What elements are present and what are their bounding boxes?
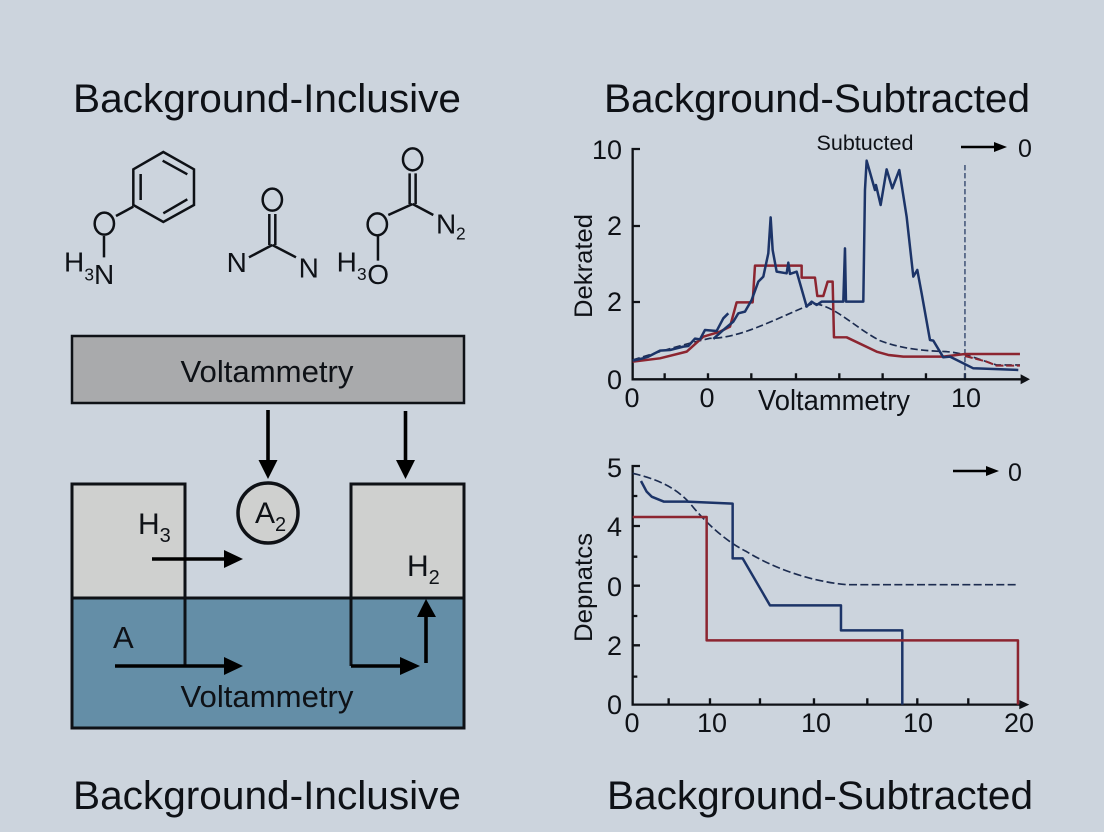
molecule: urea: N xyxy=(227,247,247,278)
molecule: carbamate: H xyxy=(337,247,357,278)
y ticks xyxy=(607,453,622,720)
molecule: urea xyxy=(227,189,319,284)
arrow: H3 right xyxy=(152,550,243,568)
label: H2: H xyxy=(407,550,429,583)
y ticks: 0 xyxy=(607,365,622,395)
panel: left electrode xyxy=(72,484,185,598)
x ticks xyxy=(624,383,981,413)
arrow legend: 0 xyxy=(1018,135,1032,163)
label: H3: 3 xyxy=(160,525,171,547)
arrow: up to H2 xyxy=(417,599,436,663)
x ticks: 0 xyxy=(624,708,640,738)
y ticks: 2 xyxy=(607,211,622,241)
icon: A2 circle: A xyxy=(255,497,275,530)
y ticks xyxy=(592,135,622,395)
chart: top right xyxy=(570,132,1032,417)
dashed curve xyxy=(633,473,1017,585)
molecule: urea: N xyxy=(299,253,319,284)
molecule: carbamate: 3 xyxy=(357,264,367,284)
axes xyxy=(633,149,1030,384)
heading: background-inclusive top: Background-Inclusive xyxy=(73,77,461,121)
dashed curve xyxy=(633,303,1020,365)
x ticks: 10 xyxy=(951,383,981,413)
arrow: bar to right box xyxy=(396,411,415,479)
icon: A2 circle xyxy=(238,483,298,543)
label: A: A xyxy=(113,620,134,655)
panel: voltammetry bar xyxy=(72,336,464,403)
y ticks: 2 xyxy=(607,287,622,317)
x ticks: 10 xyxy=(801,708,831,738)
arrow: right electrode horizontal xyxy=(351,657,420,675)
y ticks: 0 xyxy=(607,572,622,602)
red curve xyxy=(633,517,1018,705)
panel: voltammetry bar: Voltammetry xyxy=(180,354,354,389)
heading: background-subtracted bottom: Background-Subtracted xyxy=(607,774,1033,818)
blue curve xyxy=(633,161,1018,370)
molecule: phenoxy amine: N xyxy=(94,259,114,290)
arrow legend xyxy=(953,459,1022,487)
panel: right electrode xyxy=(351,484,464,598)
label: voltammetry: Voltammetry xyxy=(180,679,354,714)
x axis label: Voltammetry xyxy=(758,385,910,417)
x ticks: 10 xyxy=(903,708,933,738)
axes xyxy=(633,466,1029,709)
chart: bottom right xyxy=(570,453,1034,738)
arrow legend xyxy=(961,135,1032,163)
y axis label: Depnatcs xyxy=(570,533,598,642)
y ticks: 10 xyxy=(592,135,622,165)
arrow legend: 0 xyxy=(1008,459,1022,487)
label: H2: 2 xyxy=(429,567,440,589)
molecule structures xyxy=(64,148,466,290)
x ticks xyxy=(624,708,1034,738)
molecule: carbamate xyxy=(337,148,466,290)
icon: A2 circle: 2 xyxy=(275,514,286,536)
blue curve xyxy=(641,481,902,705)
marker line xyxy=(963,165,967,379)
cell outline xyxy=(72,484,464,728)
y ticks: 4 xyxy=(607,512,622,542)
panel: electrolyte xyxy=(72,598,464,728)
heading: background-inclusive bottom: Background-Inclusive xyxy=(73,774,461,818)
data curves xyxy=(633,473,1018,705)
molecule: phenoxy amine: H xyxy=(64,247,84,278)
molecule: phenoxy amine: 3 xyxy=(84,265,94,285)
heading: background-subtracted top: Background-Subtracted xyxy=(604,77,1030,121)
annotation: subtucted: Subtucted xyxy=(816,132,914,155)
arrow: A right xyxy=(115,657,243,675)
molecule: carbamate: N xyxy=(436,208,456,239)
label: H3: H xyxy=(138,508,160,541)
x ticks: 20 xyxy=(1004,708,1034,738)
y axis label: Dekrated xyxy=(570,214,598,318)
red curve xyxy=(633,266,1020,362)
x ticks: 0 xyxy=(699,383,715,413)
molecule: phenoxy amine xyxy=(64,152,194,290)
y ticks: 2 xyxy=(607,631,622,661)
molecule: carbamate: O xyxy=(367,259,389,290)
arrow: bar to A2 xyxy=(258,410,278,479)
data curves xyxy=(633,161,1020,379)
molecule: carbamate: 2 xyxy=(456,223,466,243)
panel: electrochemical cell xyxy=(72,483,464,728)
x ticks: 0 xyxy=(624,383,640,413)
y ticks: 5 xyxy=(607,453,622,483)
x ticks: 10 xyxy=(697,708,727,738)
y ticks: 0 xyxy=(607,690,622,720)
